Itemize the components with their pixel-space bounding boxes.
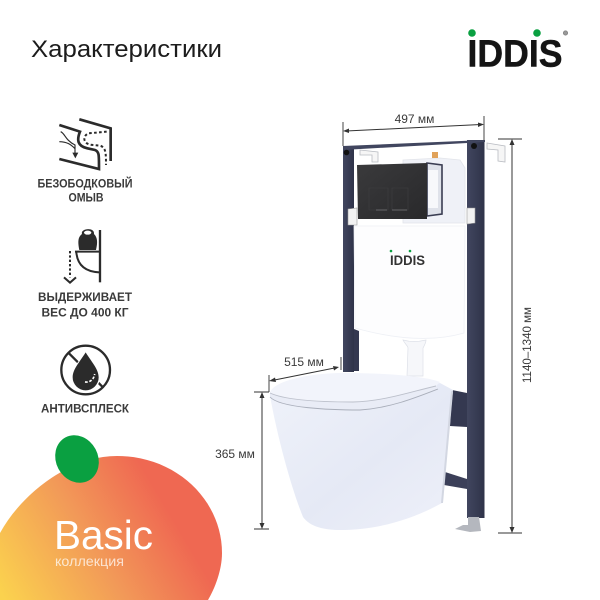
flush plate: [357, 163, 427, 219]
cistern cover: [354, 226, 465, 338]
toilet seat lid: [270, 373, 440, 410]
label: rimless flush second line: ОМЫВ: [68, 190, 104, 204]
label: rimless flush: БЕЗОБОДКОВЫЙ: [38, 176, 132, 190]
dimension: width 497 mm: 497 мм: [395, 112, 434, 126]
cistern mechanism: [348, 152, 475, 225]
dimension: height 365 mm: [215, 392, 269, 529]
collection badge: Basic: [54, 512, 153, 558]
dimension: height 1140-1340 mm: 1140–1340 мм: [520, 307, 534, 383]
dimension: height 1140-1340 mm: [498, 139, 534, 533]
icon: supports 400 kg: [64, 229, 100, 283]
dimension: depth 515 mm: [269, 355, 341, 392]
icon: anti-splash: [61, 346, 110, 394]
top mounting brackets: [360, 143, 505, 162]
label: anti-splash: АНТИВСПЛЕСК: [41, 402, 130, 416]
dimension: depth 515 mm: 515 мм: [284, 355, 324, 369]
cistern cover: IDDIS: [390, 252, 425, 268]
collection badge: коллекция: [55, 553, 124, 569]
installation frame: [343, 140, 485, 532]
dimension: height 365 mm: 365 мм: [215, 447, 255, 461]
title: Характеристики: [31, 36, 222, 63]
dimension: width 497 mm: [343, 112, 484, 146]
drain pipe: [403, 340, 426, 376]
collection badge: [0, 428, 222, 600]
logo: IDDIS: IDDIS: [468, 34, 562, 76]
label: supports 400 kg: ВЫДЕРЖИВАЕТ: [38, 290, 133, 304]
label: supports 400 kg second line: ВЕС ДО 400 КГ: [42, 306, 129, 320]
toilet bowl: [270, 383, 453, 530]
icon: rimless flush: [59, 119, 111, 169]
